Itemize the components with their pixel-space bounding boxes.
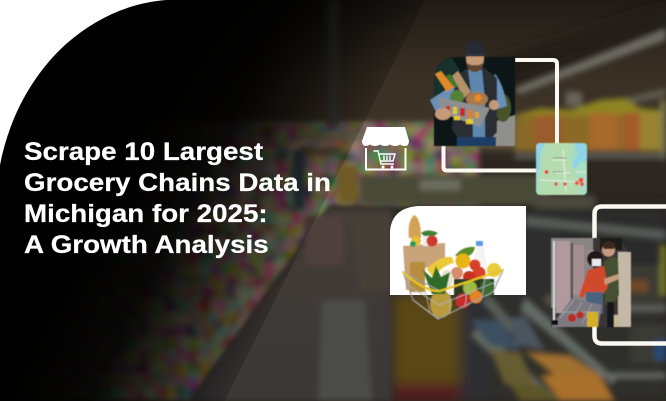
map thumbnail xyxy=(536,143,587,195)
frame: bottom right outline xyxy=(594,206,666,344)
illustration: grocery basket xyxy=(403,215,503,319)
aisle bars and goods, right xyxy=(525,216,666,240)
floor xyxy=(190,208,392,401)
title: A Growth Analysis xyxy=(24,231,269,259)
ceiling beam xyxy=(515,28,666,95)
icon: storefront with cart xyxy=(362,127,409,170)
title: Grocery Chains Data in xyxy=(24,169,331,197)
photo: couple shopping at freezer aisle xyxy=(551,238,631,327)
title: Scrape 10 Largest xyxy=(24,138,263,166)
white panel behind basket xyxy=(390,206,526,295)
title xyxy=(24,138,331,259)
photo: man holding grocery basket xyxy=(430,41,515,146)
centre store goods xyxy=(296,132,364,140)
frame: top outline xyxy=(444,60,557,170)
title: Michigan for 2025: xyxy=(24,200,268,228)
yellow and red shelf goods xyxy=(515,98,660,122)
